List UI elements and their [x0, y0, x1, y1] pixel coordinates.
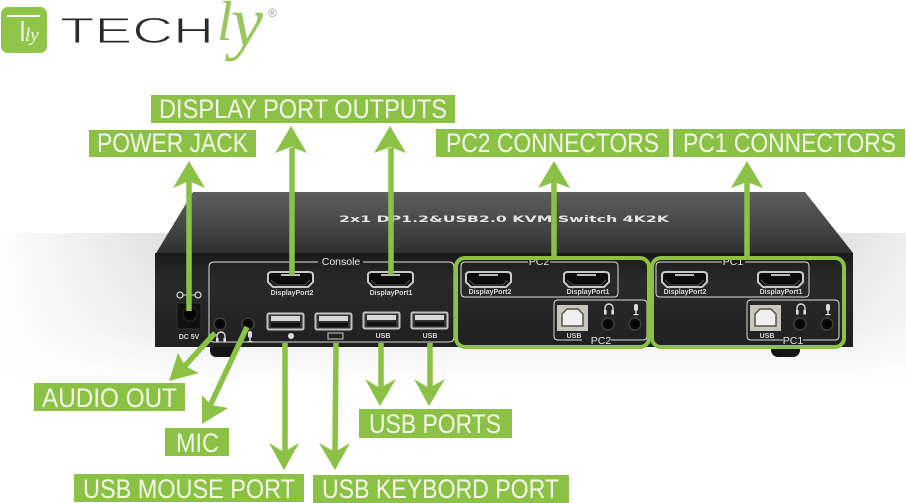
feet: [210, 340, 800, 357]
PC1 panel: USB: [760, 333, 774, 340]
device title: 2x1 DP1.2&USB2.0 KVM Switch 4K2K: [339, 215, 671, 225]
PC1 panel: DisplayPort2: [664, 289, 707, 296]
label: power jack: POWER JACK: [97, 128, 248, 158]
KVM switch device: [155, 192, 853, 357]
console panel: Console: [322, 256, 360, 268]
console DisplayPort 2: [268, 272, 314, 297]
PC2 panel: PC2: [591, 335, 611, 347]
label: USB ports: USB PORTS: [369, 409, 501, 439]
label: audio out: AUDIO OUT: [42, 383, 177, 413]
console USB ports: USB: [376, 333, 390, 340]
grey floor band: [0, 233, 906, 385]
arrow: USB port 2: [414, 343, 445, 406]
arrow: display port 2: [275, 126, 307, 275]
power jack: DC 5V: [179, 334, 200, 341]
label: PC2 connectors: PC2 CONNECTORS: [446, 128, 659, 158]
label: display port outputs: DISPLAY PORT OUTPUTS: [159, 94, 447, 124]
console USB ports: [268, 312, 448, 340]
PC1 panel: [652, 256, 844, 347]
PC1 panel: PC1: [723, 256, 743, 268]
arrow: PC1 connectors: [731, 161, 763, 258]
logo badge: ly: [25, 25, 39, 46]
console panel: [209, 256, 454, 342]
arrow: USB keyboard port: [319, 343, 350, 470]
logo: [1, 0, 277, 62]
arrow: power jack: [173, 161, 205, 311]
console DisplayPort 1: [368, 272, 413, 297]
power jack: [177, 292, 201, 341]
logo badge: [1, 7, 47, 53]
PC2 panel: [456, 256, 649, 347]
arrow: display port 1: [374, 126, 406, 275]
label: mic: MIC: [176, 428, 219, 458]
PC2 panel: DisplayPort2: [469, 289, 512, 296]
PC1 panel: PC1: [783, 335, 803, 347]
arrow: PC2 connectors: [538, 161, 570, 258]
PC2 panel: USB: [567, 333, 581, 340]
top face: [155, 192, 853, 255]
console USB ports: USB: [423, 333, 437, 340]
arrow: audio out: [169, 333, 215, 381]
PC1 panel: DisplayPort1: [760, 289, 803, 296]
console DisplayPort 1: DisplayPort1: [370, 290, 413, 297]
front face: [155, 253, 853, 347]
arrow: USB port 1: [365, 343, 396, 406]
PC2 panel: DisplayPort1: [567, 289, 610, 296]
PC2 panel: PC2: [529, 256, 549, 268]
logo wordmark: TECH: [60, 10, 214, 51]
registered mark: ®: [268, 6, 277, 20]
console audio jacks: [214, 318, 254, 342]
console DisplayPort 2: DisplayPort2: [271, 290, 314, 297]
arrow: USB mouse port: [269, 343, 299, 470]
grey band side fade: [0, 233, 906, 385]
arrow: mic: [202, 327, 247, 424]
